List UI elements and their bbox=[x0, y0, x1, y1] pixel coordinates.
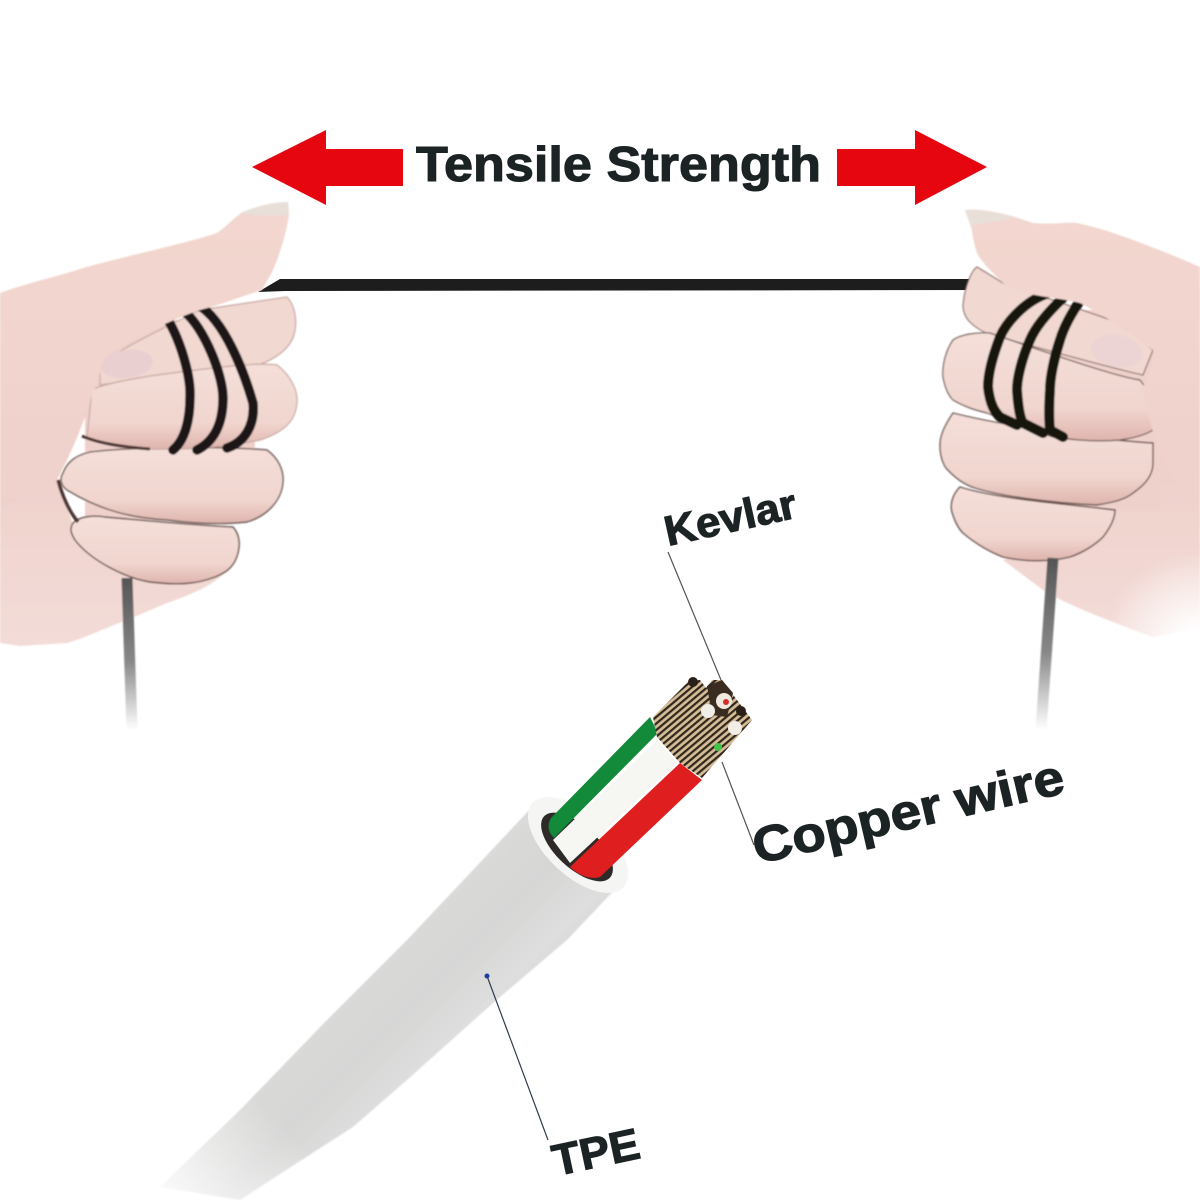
fingernail bbox=[99, 347, 155, 381]
green wire bbox=[549, 717, 658, 838]
label: Copper wire bbox=[747, 749, 1069, 875]
ring finger bbox=[61, 448, 283, 523]
copper strands bbox=[653, 677, 752, 778]
ring finger bbox=[940, 413, 1153, 505]
white cable cross-section bbox=[140, 677, 752, 1200]
jacket opening bbox=[530, 801, 624, 893]
lower palm bbox=[0, 478, 227, 646]
thumbnail bbox=[965, 210, 1012, 226]
index finger bbox=[100, 297, 296, 385]
notch at tip bbox=[735, 690, 752, 712]
left hand bbox=[0, 202, 297, 730]
callout: kevlar bbox=[660, 480, 801, 680]
leader line bbox=[668, 552, 721, 680]
jacket end fade bbox=[140, 1060, 345, 1200]
middle finger bbox=[87, 364, 297, 449]
outer TPE jacket bbox=[160, 806, 622, 1200]
leader line bbox=[722, 762, 754, 845]
title text: Tensile Strength bbox=[416, 138, 821, 192]
arrow: right red bbox=[837, 130, 987, 205]
marker dot bbox=[484, 974, 490, 978]
palm crease bbox=[58, 480, 78, 522]
hand backing bbox=[85, 320, 255, 520]
arrow: left red bbox=[252, 130, 403, 205]
finger crease bbox=[82, 436, 150, 449]
index finger bbox=[963, 267, 1153, 375]
hand fade bbox=[1100, 550, 1200, 650]
lower palm bbox=[1003, 267, 1200, 637]
leader line bbox=[487, 976, 548, 1140]
fingernail bbox=[1089, 331, 1145, 371]
middle finger bbox=[943, 333, 1153, 441]
callout: copper wire bbox=[722, 749, 1069, 875]
cable tail bbox=[1041, 558, 1053, 730]
red wire bbox=[570, 763, 702, 878]
copper bundle body bbox=[653, 680, 752, 778]
thumb and heel of hand bbox=[965, 210, 1200, 507]
hand backing bbox=[1000, 310, 1160, 510]
little finger bbox=[71, 516, 239, 584]
thumbnail bbox=[240, 202, 289, 216]
wrapped cable loops bbox=[988, 294, 1082, 437]
thumb and heel of hand bbox=[0, 202, 289, 507]
callout: TPE bbox=[484, 974, 644, 1186]
little finger bbox=[951, 487, 1115, 561]
white wire bbox=[553, 740, 677, 863]
right hand bbox=[940, 210, 1200, 730]
jacket rim bbox=[512, 780, 644, 910]
heading: tensile strength bbox=[252, 130, 987, 205]
wrapped cable loops bbox=[168, 305, 253, 450]
label: Kevlar bbox=[660, 480, 801, 555]
black cable stretched between hands bbox=[258, 279, 1015, 292]
strand tips bbox=[707, 680, 733, 717]
cable tail bbox=[127, 578, 132, 730]
notch between bundles bbox=[700, 680, 712, 688]
label: TPE bbox=[548, 1120, 644, 1186]
